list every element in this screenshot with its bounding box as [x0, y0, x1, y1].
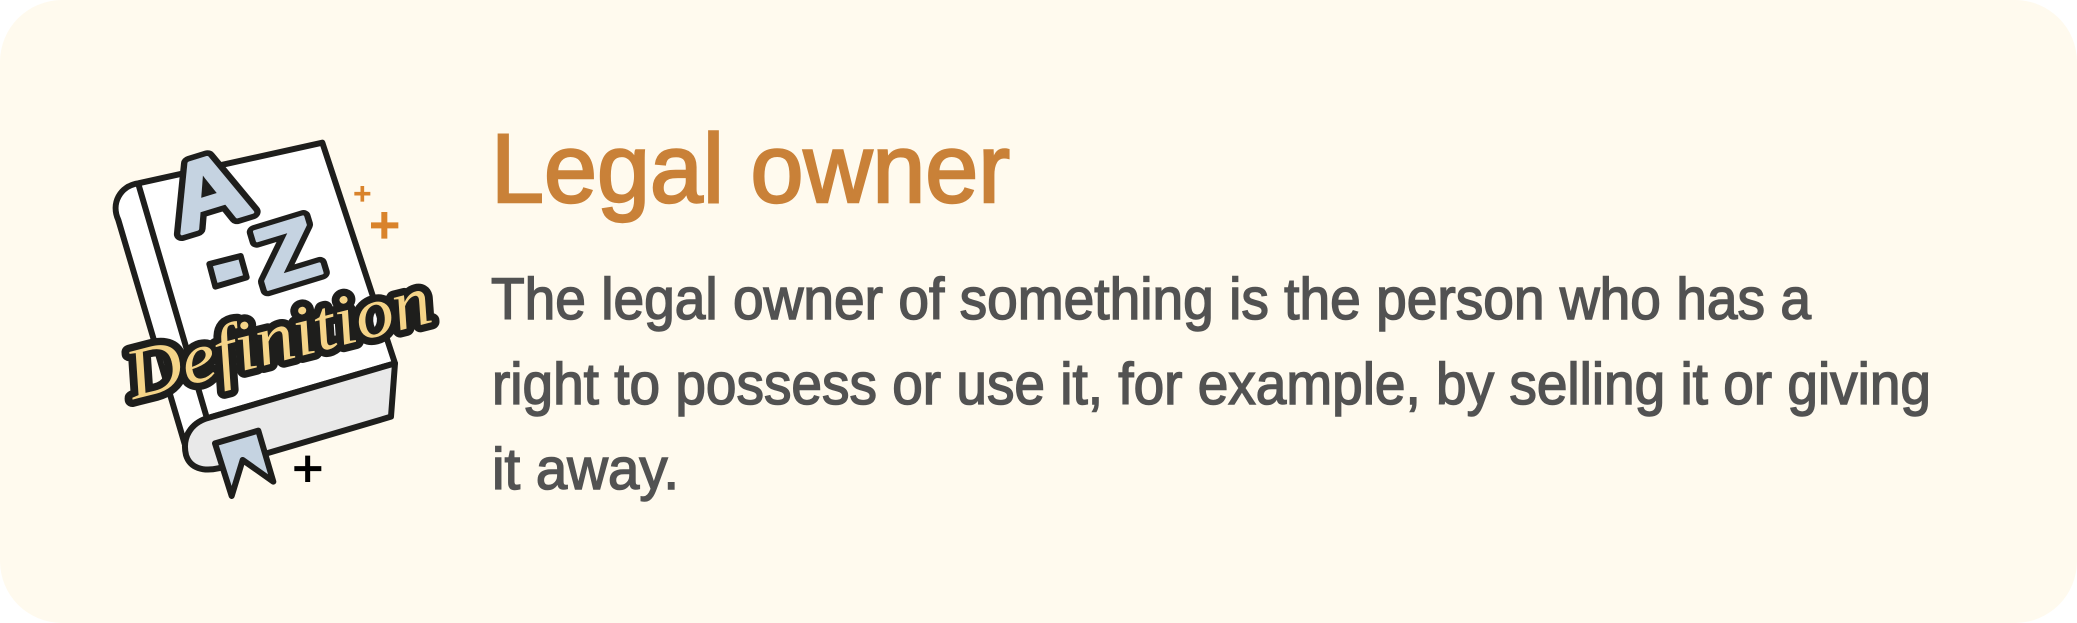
letter Z: Z — [243, 199, 330, 309]
spine line — [138, 184, 207, 417]
body line 3: it away. — [492, 437, 679, 502]
dash — [209, 256, 247, 287]
script word: Definition: Definition — [116, 259, 439, 415]
letter Z: Z — [243, 199, 330, 309]
body line 2: right to possess or use it, for example, by selling it or giving — [492, 352, 1931, 417]
book pages — [185, 363, 395, 470]
icon: definition book — [116, 129, 439, 496]
letter A: A — [154, 129, 261, 254]
sparkle: large orange plus — [371, 212, 398, 239]
title: Legal owner — [491, 114, 1010, 223]
sparkle: small orange plus — [354, 186, 370, 202]
body text — [491, 267, 1931, 502]
book cover — [116, 143, 395, 445]
body line 1: The legal owner of something is the person who has a — [491, 267, 1812, 332]
sparkle: black plus — [294, 456, 321, 482]
bookmark — [215, 431, 273, 496]
letter A: A — [154, 129, 261, 254]
